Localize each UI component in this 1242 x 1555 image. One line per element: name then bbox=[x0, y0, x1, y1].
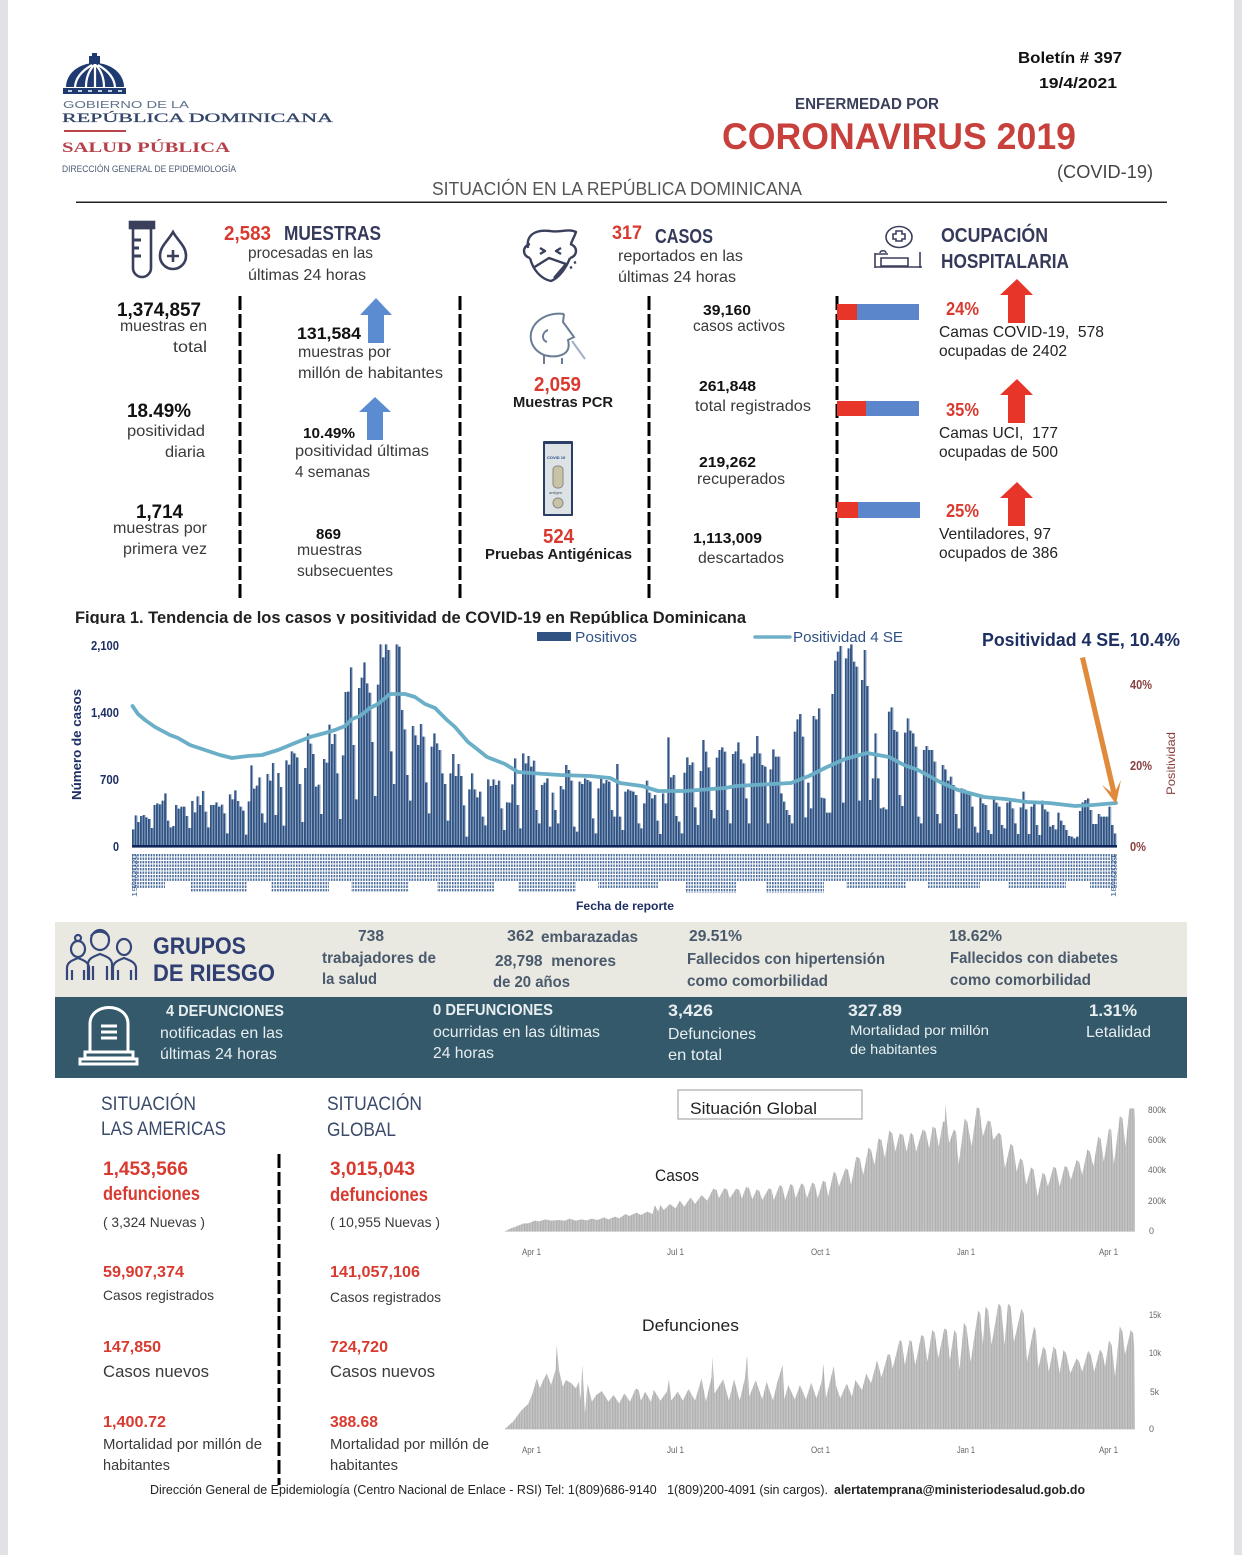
axis labels: 600k bbox=[1148, 1135, 1166, 1145]
stat: hipertensión: 29.51% bbox=[689, 928, 742, 945]
stat: trabajadores de la salud bbox=[322, 928, 436, 988]
heading: 317 casos: 317 bbox=[612, 223, 642, 244]
stat: casos registrados: 141,057,106 bbox=[330, 1264, 420, 1281]
stat: muestras por millón: muestras por bbox=[298, 344, 392, 361]
stat: muestras por primera vez: primera vez bbox=[123, 541, 207, 558]
logo: Gobierno de la República Dominicana, Salud Pública bbox=[62, 53, 334, 175]
daily positive cases bars bbox=[132, 644, 1117, 845]
stat: muestras subsecuentes bbox=[297, 527, 393, 580]
stat: total registrados bbox=[695, 378, 811, 415]
stat: casos registrados: Casos registrados bbox=[103, 1287, 214, 1303]
heading: global: GLOBAL bbox=[327, 1120, 396, 1141]
stat: embarazadas y menores: embarazadas bbox=[541, 929, 638, 946]
footer contact line: alertatemprana@ministeriodesalud.gob.do bbox=[834, 1482, 1085, 1497]
stat: diabetes bbox=[949, 928, 1118, 989]
stat: muestras por millón bbox=[297, 324, 443, 382]
right axis labels: 40% bbox=[1130, 677, 1152, 692]
left axis labels: Número de casos bbox=[69, 689, 84, 800]
heading: grupos de riesgo: GRUPOS bbox=[153, 933, 246, 960]
heading: grupos de riesgo: DE RIESGO bbox=[153, 960, 275, 987]
heading: 317 casos bbox=[612, 223, 743, 286]
heading: ocupación hospitalaria bbox=[941, 223, 1069, 273]
chart: global cases bbox=[504, 1103, 1166, 1257]
stat: camas UCI: ocupadas de 500 bbox=[939, 444, 1058, 461]
icon: nasal swab bbox=[531, 314, 585, 364]
stat: defunciones: ( 10,955 Nuevas ) bbox=[330, 1214, 440, 1230]
stat: camas UCI bbox=[939, 379, 1058, 461]
left axis labels: 0 bbox=[113, 839, 119, 854]
chart: trend of cases and positivity bbox=[69, 629, 1180, 913]
stat: total registrados: 261,848 bbox=[699, 378, 756, 395]
axis labels: 5k bbox=[1150, 1387, 1159, 1397]
arrow: callout to line end bbox=[1080, 657, 1121, 804]
left axis labels bbox=[69, 638, 119, 854]
stat: diabetes: Fallecidos con diabetes bbox=[950, 950, 1118, 967]
axis labels: Jan 1 bbox=[957, 1445, 975, 1455]
stat: muestras en total bbox=[117, 300, 207, 356]
stat: camas COVID: Camas COVID-19, 578 bbox=[939, 324, 1104, 341]
stat: descartados bbox=[693, 530, 784, 567]
stat: casos nuevos bbox=[103, 1339, 209, 1381]
heading: grupos de riesgo bbox=[153, 933, 275, 987]
callout: positividad 4 SE: Positividad 4 SE, 10.4% bbox=[982, 630, 1180, 650]
icon: dome bbox=[63, 53, 126, 94]
stat: casos nuevos: Casos nuevos bbox=[103, 1362, 209, 1381]
stat: muestras PCR: 2,059 bbox=[534, 374, 581, 396]
stat: muestras por primera vez bbox=[113, 502, 208, 558]
panel: muestras bbox=[113, 222, 460, 598]
section heading: SITUACIÓN EN LA REPÚBLICA DOMINICANA bbox=[432, 178, 802, 199]
stat: casos nuevos: 724,720 bbox=[330, 1339, 388, 1356]
heading: las américas bbox=[101, 1093, 226, 1140]
stat: defunciones bbox=[330, 1159, 440, 1230]
stat: casos registrados: Casos registrados bbox=[330, 1289, 441, 1305]
date labels on x axis: 19/4/2020 bbox=[130, 854, 139, 897]
stat: pruebas antigénicas: 524 bbox=[543, 526, 575, 548]
bulletin number: Boletín # 397 bbox=[1018, 50, 1122, 67]
stat: embarazadas y menores: 362 bbox=[507, 928, 534, 945]
axis labels: Apr 1 bbox=[522, 1247, 541, 1257]
stat: mortalidad: habitantes bbox=[103, 1458, 170, 1474]
arrow: muestras por millón up bbox=[360, 298, 392, 343]
stat: mortalidad bbox=[103, 1414, 262, 1474]
stat: muestras en total: total bbox=[173, 339, 207, 356]
icon: masked face coughing bbox=[524, 230, 576, 281]
stat: camas COVID bbox=[939, 279, 1104, 360]
axis labels: 15k bbox=[1149, 1310, 1161, 1320]
panel: casos bbox=[485, 223, 837, 598]
stat: ventiladores bbox=[939, 482, 1058, 562]
stat: ventiladores: ocupados de 386 bbox=[939, 545, 1058, 562]
stat: embarazadas y menores: de 20 años bbox=[493, 974, 570, 991]
panel: ocupación hospitalaria bbox=[837, 223, 1104, 562]
stat: descartados: 1,113,009 bbox=[693, 530, 762, 547]
heading: 2,583 muestras: procesadas en las bbox=[248, 245, 373, 262]
panel: situación las américas bbox=[101, 1093, 279, 1485]
axis labels: Jul 1 bbox=[667, 1445, 684, 1455]
stat: defunciones: defunciones bbox=[103, 1184, 200, 1205]
bar: ventiladores 25% bbox=[837, 502, 920, 518]
stat: muestras subsecuentes: 869 bbox=[316, 527, 341, 543]
stat: casos activos: casos activos bbox=[693, 318, 785, 335]
stat: mortalidad por millón: de habitantes bbox=[850, 1041, 937, 1057]
right axis labels: 0% bbox=[1130, 839, 1146, 854]
heading: 317 casos: últimas 24 horas bbox=[618, 269, 736, 286]
icon: tombstone bbox=[80, 1008, 137, 1064]
stat: mortalidad por millón: Mortalidad por millón bbox=[850, 1022, 989, 1038]
box: situación global label bbox=[678, 1090, 862, 1119]
panel: defunciones bbox=[55, 997, 1187, 1078]
stat: defunciones: 3,015,043 bbox=[330, 1159, 415, 1180]
axis labels: 10k bbox=[1149, 1348, 1161, 1358]
label: defunciones: Defunciones bbox=[642, 1316, 739, 1335]
box: situación global label: Situación Global bbox=[690, 1099, 817, 1118]
stat: positividad diaria: positividad bbox=[127, 423, 205, 440]
stat: casos nuevos: 147,850 bbox=[103, 1339, 161, 1356]
stat: ventiladores: 25% bbox=[946, 501, 979, 521]
date labels on x axis: 18/4/2021 bbox=[1109, 854, 1118, 897]
left axis labels: 700 bbox=[100, 772, 119, 787]
stat: casos registrados bbox=[330, 1264, 441, 1305]
axis labels: 0 bbox=[1149, 1226, 1154, 1236]
stat: defunciones: ( 3,324 Nuevas ) bbox=[103, 1214, 205, 1230]
stat: casos nuevos bbox=[330, 1339, 435, 1381]
right axis labels: Positividad bbox=[1164, 732, 1178, 795]
axis labels: 0 bbox=[1149, 1424, 1154, 1434]
stat: 0 defunciones: 0 DEFUNCIONES bbox=[433, 1002, 553, 1019]
left axis labels: 2,100 bbox=[91, 638, 119, 653]
stat: 0 defunciones: 24 horas bbox=[433, 1045, 494, 1062]
chart title: Figura 1. Tendencia de los casos y positividad de COVID-19 en República Dominicana bbox=[75, 608, 747, 627]
bar: camas COVID 24% bbox=[837, 304, 919, 320]
positivity line bbox=[132, 694, 1116, 806]
right axis labels bbox=[1130, 677, 1178, 854]
stat: casos activos bbox=[693, 302, 785, 335]
stat: ventiladores: Ventiladores, 97 bbox=[939, 526, 1051, 543]
date labels on x axis bbox=[130, 853, 1118, 897]
stat: 4 defunciones bbox=[160, 1003, 284, 1063]
stat: mortalidad: Mortalidad por millón de bbox=[330, 1437, 489, 1453]
stat: camas COVID: ocupadas de 2402 bbox=[939, 343, 1067, 360]
stat: mortalidad por millón bbox=[848, 1001, 989, 1057]
icon: antigen test cassette: COVID 19 bbox=[547, 455, 566, 460]
heading: 2,583 muestras: MUESTRAS bbox=[284, 223, 381, 245]
stat: muestras por primera vez: muestras por bbox=[113, 520, 208, 537]
bar: camas UCI 35% bbox=[837, 401, 919, 416]
stat: casos registrados: 59,907,374 bbox=[103, 1264, 184, 1281]
stat: 0 defunciones bbox=[433, 1002, 600, 1062]
defunciones bars bbox=[504, 1303, 1135, 1429]
stat: muestras en total: 1,374,857 bbox=[117, 300, 201, 321]
axis labels: Oct 1 bbox=[811, 1247, 830, 1257]
logo text: salud pública: SALUD PÚBLICA bbox=[62, 139, 231, 156]
heading: 2,583 muestras: últimas 24 horas bbox=[248, 267, 366, 284]
chart legend: Positivos bbox=[575, 629, 637, 646]
axis labels: 400k bbox=[1148, 1165, 1166, 1175]
axis labels bbox=[522, 1310, 1161, 1455]
axis labels: Oct 1 bbox=[811, 1445, 830, 1455]
stat: muestras por primera vez: 1,714 bbox=[136, 502, 183, 523]
stat: 4 defunciones: notificadas en las bbox=[160, 1025, 283, 1042]
heading: global bbox=[327, 1093, 422, 1141]
stat: defunciones: defunciones bbox=[330, 1185, 428, 1206]
heading: 2,583 muestras bbox=[224, 223, 381, 284]
stat: 0 defunciones: ocurridas en las últimas bbox=[433, 1024, 600, 1041]
stat: mortalidad: Mortalidad por millón de bbox=[103, 1437, 262, 1453]
stat: trabajadores de la salud: la salud bbox=[322, 971, 377, 988]
x axis title: Fecha de reporte bbox=[576, 899, 674, 913]
stat: defunciones en total: 3,426 bbox=[668, 1001, 713, 1020]
heading: las américas: LAS AMERICAS bbox=[101, 1119, 226, 1140]
stat: positividad diaria: 18.49% bbox=[127, 401, 191, 422]
stat: pruebas antigénicas bbox=[485, 526, 632, 563]
stat: hipertensión bbox=[687, 928, 885, 990]
subtitle: (COVID-19) bbox=[1057, 162, 1153, 182]
stat: positividad últimas 4 semanas bbox=[295, 425, 429, 481]
stat: total registrados: total registrados bbox=[695, 398, 811, 415]
stat: pruebas antigénicas: Pruebas Antigénicas bbox=[485, 546, 632, 563]
casos bars bbox=[504, 1103, 1135, 1232]
stat: trabajadores de la salud: 738 bbox=[358, 928, 384, 945]
stat: mortalidad por millón: 327.89 bbox=[848, 1001, 902, 1020]
chart: global deaths bbox=[504, 1303, 1161, 1455]
bulletin date: 19/4/2021 bbox=[1039, 75, 1117, 92]
stat: recuperados: recuperados bbox=[697, 471, 785, 488]
stat: embarazadas y menores: 28,798 menores bbox=[495, 953, 616, 970]
stat: embarazadas y menores bbox=[493, 928, 638, 991]
footer contact line: Dirección General de Epidemiología (Centro Nacional de Enlace - RSI) Tel: 1(809)686-9140 1(809)200-4091 (sin cargos). bbox=[150, 1482, 828, 1497]
stat: casos nuevos: Casos nuevos bbox=[330, 1362, 435, 1381]
stat: positividad últimas 4 semanas: 4 semanas bbox=[295, 464, 370, 481]
stat: positividad últimas 4 semanas: positividad últimas bbox=[295, 443, 429, 460]
axis labels: Apr 1 bbox=[1099, 1247, 1118, 1257]
stat: casos activos: 39,160 bbox=[703, 302, 751, 319]
panel: situación global bbox=[327, 1093, 489, 1474]
stat: letalidad bbox=[1086, 1001, 1151, 1041]
stat: diabetes: 18.62% bbox=[949, 928, 1002, 945]
stat: trabajadores de la salud: trabajadores de bbox=[322, 950, 436, 967]
heading: global: SITUACIÓN bbox=[327, 1093, 422, 1115]
logo text: gobierno de la: GOBIERNO DE LA bbox=[63, 100, 189, 111]
title: CORONAVIRUS 2019 bbox=[722, 116, 1076, 157]
stat: descartados: descartados bbox=[698, 550, 784, 567]
stat: diabetes: como comorbilidad bbox=[950, 972, 1091, 989]
stat: muestras por millón: millón de habitantes bbox=[298, 365, 443, 382]
stat: muestras en total: muestras en bbox=[120, 318, 207, 335]
axis labels bbox=[522, 1105, 1166, 1257]
stat: positividad últimas 4 semanas: 10.49% bbox=[303, 425, 355, 442]
stat: casos registrados bbox=[103, 1264, 214, 1303]
stat: camas COVID: 24% bbox=[946, 299, 979, 319]
stat: camas UCI: 35% bbox=[946, 400, 979, 420]
axis labels: Jan 1 bbox=[957, 1247, 975, 1257]
stat: defunciones bbox=[103, 1159, 205, 1230]
left axis labels: 1,400 bbox=[91, 705, 119, 720]
stat: letalidad: Letalidad bbox=[1086, 1024, 1151, 1041]
logo text: dirección general: DIRECCIÓN GENERAL DE EPIDEMIOLOGÍA bbox=[62, 164, 237, 175]
stat: defunciones en total: en total bbox=[668, 1047, 722, 1064]
stat: mortalidad: habitantes bbox=[330, 1458, 398, 1474]
heading: 2,583 muestras: 2,583 bbox=[224, 223, 271, 245]
stat: mortalidad bbox=[330, 1414, 489, 1474]
axis labels: Jul 1 bbox=[667, 1247, 684, 1257]
panel: grupos de riesgo bbox=[55, 922, 1187, 997]
stat: muestras PCR: Muestras PCR bbox=[513, 394, 613, 411]
chart legend bbox=[537, 629, 903, 646]
stat: recuperados bbox=[697, 454, 785, 488]
icon: hospital bed bbox=[875, 226, 922, 268]
icon: group of people bbox=[67, 930, 136, 980]
stat: recuperados: 219,262 bbox=[699, 454, 756, 471]
heading: 317 casos: CASOS bbox=[655, 226, 713, 248]
stat: muestras por millón: 131,584 bbox=[297, 324, 362, 343]
heading: 317 casos: reportados en las bbox=[618, 248, 743, 265]
stat: 4 defunciones: últimas 24 horas bbox=[160, 1046, 277, 1063]
stat: positividad diaria: diaria bbox=[165, 444, 205, 461]
stat: camas UCI: Camas UCI, 177 bbox=[939, 425, 1058, 442]
icon: test tube and drop bbox=[130, 222, 186, 277]
axis labels: 200k bbox=[1148, 1196, 1166, 1206]
stat: defunciones en total bbox=[668, 1001, 756, 1064]
stat: muestras subsecuentes: muestras bbox=[297, 542, 362, 559]
heading: ocupación hospitalaria: HOSPITALARIA bbox=[941, 251, 1069, 273]
stat: positividad diaria bbox=[127, 401, 205, 461]
stat: hipertensión: Fallecidos con hipertensión bbox=[687, 951, 885, 968]
chart legend: Positividad 4 SE bbox=[793, 629, 903, 646]
right axis labels: 20% bbox=[1130, 758, 1152, 773]
heading: las américas: SITUACIÓN bbox=[101, 1093, 196, 1115]
stat: muestras subsecuentes: subsecuentes bbox=[297, 563, 393, 580]
stat: hipertensión: como comorbilidad bbox=[687, 973, 828, 990]
stat: defunciones: 1,453,566 bbox=[103, 1159, 188, 1180]
stat: defunciones en total: Defunciones bbox=[668, 1026, 756, 1043]
icon: antigen test cassette: antigen bbox=[549, 490, 562, 495]
axis labels: Apr 1 bbox=[522, 1445, 541, 1455]
stat: muestras PCR bbox=[513, 374, 613, 411]
stat: letalidad: 1.31% bbox=[1089, 1001, 1137, 1020]
stat: 4 defunciones: 4 DEFUNCIONES bbox=[166, 1003, 284, 1020]
axis labels: 800k bbox=[1148, 1105, 1166, 1115]
stat: mortalidad: 388.68 bbox=[330, 1414, 378, 1431]
label: casos: Casos bbox=[655, 1166, 699, 1185]
heading: ocupación hospitalaria: OCUPACIÓN bbox=[941, 223, 1048, 247]
logo text: república dominicana: REPÚBLICA DOMINICANA bbox=[62, 110, 334, 125]
title eyebrow: ENFERMEDAD POR bbox=[795, 96, 939, 113]
stat: mortalidad: 1,400.72 bbox=[103, 1414, 166, 1431]
arrow: positividad up bbox=[359, 397, 391, 440]
icon: antigen test cassette bbox=[543, 441, 573, 516]
axis labels: Apr 1 bbox=[1099, 1445, 1118, 1455]
